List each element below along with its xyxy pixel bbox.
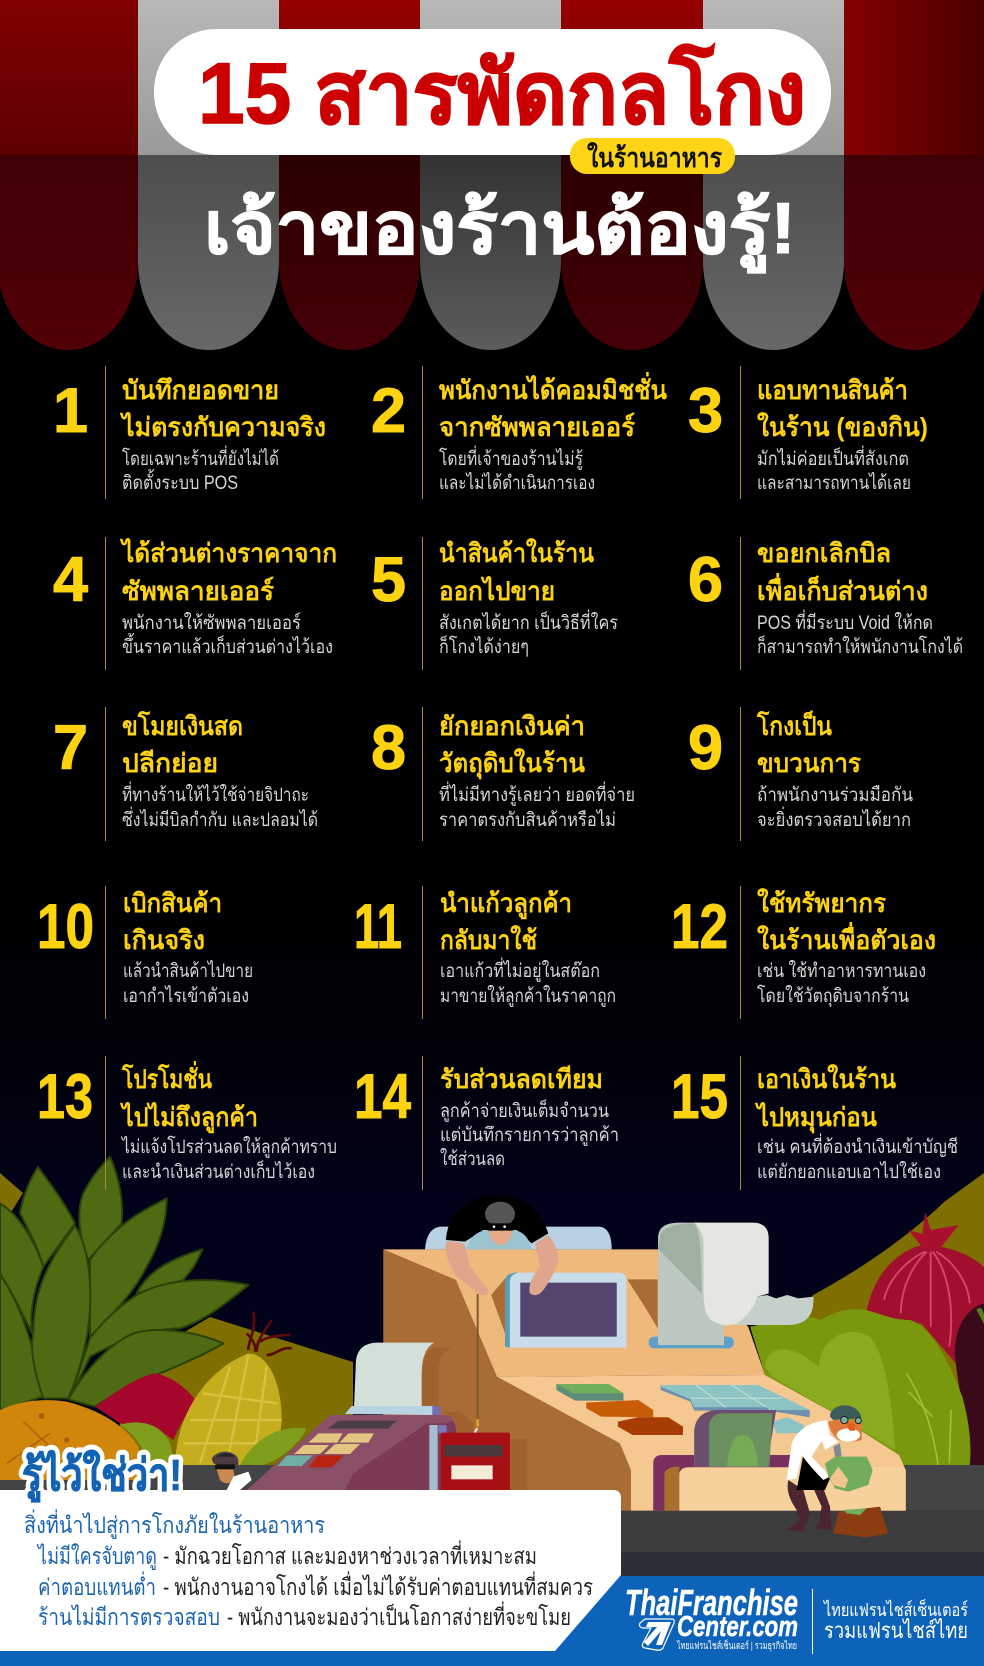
tip 10: เบิกสินค้า (123, 888, 222, 918)
logo (625, 1582, 798, 1652)
tip 5: ก็โกงได้ง่ายๆ (439, 634, 529, 658)
did you know heading: รู้ไว้ใช่ว่า! (22, 1449, 182, 1502)
did you know heading: รู้ไว้ใช่ว่า! (22, 1449, 182, 1502)
tip 14: ใช้ส่วนลด (440, 1148, 505, 1170)
tip 7: ขโมยเงินสด (122, 710, 243, 741)
tip 3: มักไม่ค่อยเป็นที่สังเกต (757, 445, 909, 470)
tip 10 (37, 886, 253, 1019)
register top surface (383, 1249, 765, 1377)
hills (0, 1173, 984, 1470)
did you know panel: - มักฉวยโอกาส และมองหาช่วงเวลาที่เหมาะสม (163, 1540, 537, 1569)
tip 13: ไปไม่ถึงลูกค้า (119, 1101, 258, 1134)
logo: Center.com (677, 1611, 798, 1643)
tip 5: นำสินค้าในร้าน (439, 538, 594, 568)
tip 12: เช่น ใช้ทำอาหารทานเอง (757, 960, 926, 982)
receipt roll (649, 1223, 813, 1348)
lettuce (750, 1309, 970, 1465)
did you know panel (0, 1490, 621, 1651)
logo: ThaiFranchise (625, 1582, 798, 1623)
cash register (383, 1223, 906, 1511)
function keys (556, 1384, 683, 1435)
tip 4 (53, 537, 337, 670)
tip 1 (53, 366, 326, 499)
tip 11: นำแก้วลูกค้า (440, 888, 572, 920)
onion (866, 1212, 984, 1367)
tip 8: 8 (371, 713, 406, 783)
tip 6: ขอยกเลิกบิล (757, 538, 891, 568)
did you know panel: ร้านไม่มีการตรวจสอบ (38, 1604, 220, 1630)
tip 11: 11 (354, 892, 402, 962)
tip 15: แต่ยักยอกแอบเอาไปใช้เอง (757, 1161, 941, 1183)
number keypad (661, 1385, 810, 1433)
tip 1: บันทึกยอดขาย (122, 375, 279, 405)
tip 7: ซึ่งไม่มีบิลกำกับ และปลอมได้ (122, 806, 318, 831)
badge: in restaurants: ในร้านอาหาร (587, 142, 722, 173)
tip 1: ติดตั้งระบบ POS (122, 469, 238, 494)
ground and road (0, 1465, 984, 1576)
tip 8: ที่ไม่มีทางรู้เลยว่า ยอดที่จ่าย (439, 781, 635, 806)
thief at top (425, 1195, 612, 1295)
title line 1: 15 สารพัดกลโกง (198, 43, 806, 142)
tip 9: จะยิ่งตรวจสอบได้ยาก (757, 806, 911, 831)
green husks and corn (120, 1312, 307, 1465)
tip 2: โดยที่เจ้าของร้านไม่รู้ (439, 445, 583, 470)
tip 2: 2 (371, 376, 406, 446)
tip 2: จากซัพพลายเออร์ (439, 412, 635, 442)
monitor (505, 1273, 626, 1348)
tip 7 (53, 707, 318, 841)
tip 12 (671, 886, 936, 1019)
tip 1: ไม่ตรงกับความจริง (119, 411, 326, 442)
tip 11: กลับมาใช้ (440, 925, 537, 955)
tip 14 (354, 1056, 619, 1190)
blue footer band (0, 1576, 984, 1666)
brand tagline (822, 1598, 968, 1643)
tip 2: พนักงานได้คอมมิชชั่น (439, 371, 667, 405)
tip 7: ปลีกย่อย (122, 748, 218, 778)
tip 4: ขึ้นราคาแล้วเก็บส่วนต่างไว้เอง (122, 633, 333, 658)
tip 8 (371, 707, 635, 841)
tip 15: เช่น คนที่ต้องนำเงินเข้าบัญชี (757, 1133, 958, 1158)
title pill (154, 29, 831, 155)
tip 3: แอบทานสินค้า (757, 375, 908, 405)
tip 11: เอาแก้วที่ไม่อยู่ในสต๊อก (440, 957, 600, 982)
tip 15: 15 (671, 1062, 728, 1132)
did you know panel: - พนักงานจะมองว่าเป็นโอกาสง่ายที่จะขโมย (227, 1601, 571, 1630)
cash drawer (653, 1410, 906, 1511)
tip 14: ลูกค้าจ่ายเงินเต็มจำนวน (440, 1098, 609, 1122)
tip 6: เพื่อเก็บส่วนต่าง (757, 572, 928, 606)
tip 14: 14 (354, 1062, 411, 1132)
tip 13: และนำเงินส่วนต่างเก็บไว้เอง (122, 1159, 315, 1183)
tip 9: ขบวนการ (757, 748, 861, 778)
tip 9: 9 (688, 713, 723, 783)
red cash box (441, 1433, 527, 1493)
title line 2: เจ้าของร้านต้องรู้! (204, 189, 796, 274)
tip 4: ได้ส่วนต่างราคาจาก (119, 537, 337, 568)
red fruit (95, 1373, 195, 1440)
tip 6: POS ที่มีระบบ Void ให้กด (757, 609, 933, 634)
pineapple body (0, 1400, 143, 1480)
tip 6: 6 (688, 545, 723, 615)
did you know panel: ค่าตอบแทนต่ำ (38, 1571, 156, 1600)
tip 1: 1 (53, 376, 88, 446)
tip 12: 12 (671, 892, 728, 962)
awning (0, 0, 984, 350)
tip 15 (671, 1056, 958, 1190)
tip 8: ราคาตรงกับสินค้าหรือไม่ (439, 809, 616, 831)
tip 12: ในร้านเพื่อตัวเอง (757, 921, 936, 955)
tip 5 (371, 537, 618, 670)
tip 13: โปรโมชั่น (121, 1060, 212, 1094)
wedge right of monitor (627, 1279, 658, 1328)
aubergine (955, 1303, 984, 1465)
tip 15: เอาเงินในร้าน (757, 1064, 896, 1094)
tip 14: แต่บันทึกรายการว่าลูกค้า (440, 1125, 619, 1146)
did you know panel: - พนักงานอาจโกงได้ เมื่อไม่ได้รับค่าตอบแทนที่สมควร (163, 1571, 593, 1600)
tip 6 (688, 537, 963, 670)
tip 9: โกงเป็น (756, 710, 832, 741)
tip 3: ในร้าน (ของกิน) (757, 412, 928, 442)
tip 9: ถ้าพนักงานร่วมมือกัน (757, 785, 913, 806)
tip 1: โดยเฉพาะร้านที่ยังไม่ได้ (122, 445, 279, 470)
tip 15: ไปหมุนก่อน (754, 1101, 877, 1134)
tip 5: ออกไปขาย (439, 575, 555, 606)
tip 8: วัตถุดิบในร้าน (439, 748, 585, 780)
tip 13: 13 (37, 1062, 93, 1132)
tip 7: 7 (53, 713, 88, 783)
did you know panel: สิ่งที่นำไปสู่การโกงภัยในร้านอาหาร (24, 1509, 325, 1539)
register side (383, 1249, 631, 1511)
tip 4: 4 (53, 545, 88, 615)
thief stealing money (787, 1405, 888, 1537)
tip 10: เอากำไรเข้าตัวเอง (123, 985, 249, 1007)
wedge left of monitor (491, 1275, 510, 1347)
tip 9 (688, 707, 913, 841)
tip 12: โดยใช้วัตถุดิบจากร้าน (757, 984, 909, 1008)
tip 5: 5 (371, 545, 406, 615)
tip 11: มาขายให้ลูกค้าในราคาถูก (440, 985, 616, 1007)
tip 3: 3 (688, 376, 723, 446)
tip 10: เกินจริง (123, 925, 205, 955)
tip 11 (354, 886, 616, 1019)
small till and paper (243, 1343, 473, 1493)
tip 13 (37, 1056, 337, 1190)
did you know panel: ไม่มีใครจับตาดู (36, 1543, 157, 1570)
tip 2: และไม่ได้ดำเนินการเอง (439, 472, 595, 494)
keyboard surface (497, 1375, 906, 1511)
tip 4: ซัพพลายเออร์ (122, 576, 274, 606)
tip 4: พนักงานให้ซัพพลายเออร์ (122, 612, 301, 634)
fishing string and hook (474, 1294, 482, 1440)
tip 13: ไม่แจ้งโปรส่วนลดให้ลูกค้าทราบ (120, 1135, 337, 1158)
tip 8: ยักยอกเงินค่า (439, 711, 585, 741)
logo: ไทยแฟรนไชส์เซ็นเตอร์ | รวมธุรกิจไทย (676, 1638, 797, 1652)
pineapple leaves (0, 1157, 248, 1410)
tip 2 (371, 366, 667, 499)
logo divider (812, 1589, 813, 1654)
tip 10: 10 (37, 892, 94, 962)
tip 3 (688, 366, 928, 499)
tip 12: ใช้ทรัพยากร (757, 888, 886, 918)
tip 14: รับส่วนลดเทียม (440, 1064, 603, 1094)
tip 7: ที่ทางร้านให้ไว้ใช้จ่ายจิปาถะ (122, 781, 309, 806)
tip 5: สังเกตได้ยาก เป็นวิธีที่ใคร (439, 609, 618, 634)
tip 3: และสามารถทานได้เลย (757, 472, 911, 494)
small thief (212, 1452, 252, 1490)
tip 10: แล้วนำสินค้าไปขาย (123, 960, 253, 982)
